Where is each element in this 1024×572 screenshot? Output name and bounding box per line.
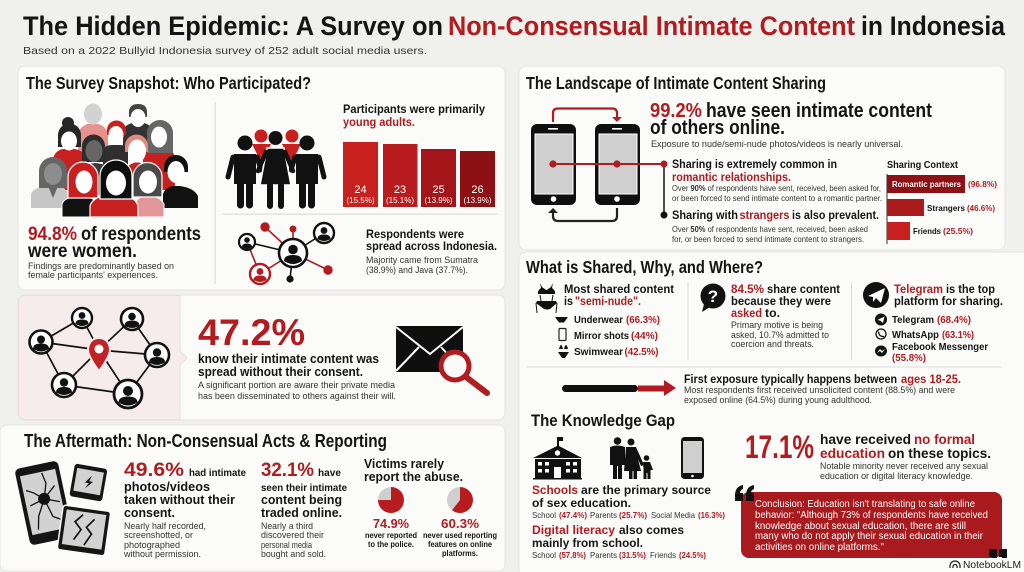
icon: lingerie — [536, 283, 557, 313]
stat: taken without consent — [123, 460, 246, 559]
heading: young adults: Participants were primarily — [343, 104, 486, 116]
bar chart: sharing context: (46.6%) — [967, 203, 995, 213]
subtitle: Based on a 2022 Bullyid Indonesia survey of 252 adult social media users. — [23, 45, 427, 57]
stat: traded online: 32.1% — [261, 460, 314, 481]
stat: 47.2 percent: spread without their consent. — [198, 364, 363, 379]
text: motive: because they were — [731, 296, 831, 308]
bar chart: ages: (15.5%) — [346, 196, 375, 205]
icon: family — [610, 437, 653, 479]
list: shared content types — [555, 315, 660, 358]
stat: women respondents: 94.8% — [28, 224, 77, 245]
text: conclusion quote: activities on online platforms." — [755, 542, 885, 553]
stat: taken without consent: screenshotted, or — [124, 530, 193, 540]
text: spread across Indonesia: (38.9%) and Java (37.7%). — [366, 265, 468, 275]
text: digital literacy: also comes — [619, 523, 684, 537]
stat: women respondents — [27, 224, 201, 281]
stat: 99.2 percent: 99.2% — [650, 100, 702, 122]
stat: 99.2 percent: have seen intimate content — [706, 100, 932, 122]
icon: school building — [533, 437, 582, 480]
text: strangers: Sharing with — [672, 210, 738, 222]
text: conclusion quote: knowledge about sexual education, there are still — [755, 521, 966, 532]
pie chart: platform reporting — [423, 487, 497, 558]
stat: 17.1 percent: have received — [820, 431, 911, 447]
icon: opening quote — [735, 485, 754, 501]
pie chart: police reporting: to the police. — [368, 540, 414, 549]
icon: two phones exchanging — [531, 108, 668, 221]
stat: women respondents: female participants' experiences. — [28, 270, 158, 281]
panel: landscape of sharing — [519, 66, 1005, 250]
bar chart: sharing context: Strangers — [927, 203, 965, 213]
watermark: NotebookLM — [946, 558, 1024, 572]
icon: envelope and magnifier — [396, 326, 487, 393]
list: shared content types: (44%) — [631, 331, 658, 342]
heading: survey snapshot: The Survey Snapshot: Who Participated? — [26, 73, 311, 93]
stat: traded online: bought and sold. — [261, 549, 326, 559]
stat: 17.1 percent: Notable minority never received any sexual — [820, 461, 988, 471]
stat: 17.1 percent: education or digital literacy knowledge. — [820, 471, 973, 481]
stat: women respondents: Findings are predominantly based on — [28, 261, 174, 272]
stat: 47.2 percent — [198, 312, 396, 402]
stat: traded online: Nearly a third — [261, 521, 313, 531]
stat: 47.2 percent: A significant portion are aware their private media — [198, 380, 396, 391]
text: first exposure: ages 18-25. — [901, 374, 961, 386]
bar chart: sharing context: Friends — [913, 226, 941, 236]
text: motive: to. — [765, 308, 780, 320]
text: romantic relationships: Sharing is extremely common in — [672, 159, 837, 171]
pie chart: police reporting: 74.9% — [373, 517, 409, 531]
text: romantic relationships: or been forced to send intimate content to a romantic partner. — [672, 193, 882, 203]
icon: question bubble: ? — [708, 287, 718, 306]
bar chart: ages: (15.1%) — [386, 196, 414, 205]
panel: the aftermath — [0, 425, 505, 571]
stat: traded online: have — [318, 467, 341, 479]
pie chart: platform reporting: platforms. — [442, 549, 478, 558]
stat: taken without consent: photos/videos — [124, 479, 210, 494]
bar chart: ages: (13.9%) — [463, 196, 492, 205]
stat: 47.2 percent: know their intimate content was — [198, 351, 379, 366]
panel: spread without consent — [18, 295, 505, 420]
text: schools primary source: Social Media — [651, 510, 695, 520]
text: conclusion quote — [755, 499, 988, 553]
text: spread across Indonesia: Majority came from Sumatra — [366, 255, 479, 265]
text: semi-nude content: Most shared content — [564, 284, 674, 296]
text: telegram top platform: platform for sharing. — [894, 296, 1003, 308]
list: platforms: Facebook Messenger — [892, 342, 988, 353]
text: strangers: for, or been forced to send intimate content to strangers. — [672, 234, 864, 244]
title: The Hidden Epidemic: A Survey on — [23, 11, 443, 41]
callout: conclusion — [735, 485, 1007, 564]
pie chart: platform reporting: features on online — [428, 540, 493, 549]
stat: 47.2 percent: 47.2% — [198, 312, 305, 353]
stat: taken without consent: consent. — [124, 505, 175, 520]
stat: 17.1 percent: 17.1% — [745, 429, 814, 465]
text: schools primary source: of sex education. — [532, 496, 631, 510]
text: first exposure: First exposure typically happens between — [684, 374, 897, 386]
bar chart: sharing context: Sharing Context — [887, 159, 958, 171]
arrow: first exposure timeline — [562, 380, 676, 396]
text: digital literacy — [532, 523, 706, 560]
text: telegram top platform: Telegram — [894, 284, 943, 296]
bar chart: sharing context: Romantic partners — [892, 179, 961, 189]
text: semi-nude content: is — [564, 296, 573, 308]
text: conclusion quote: Conclusion: Education isn't translating to safe online — [755, 499, 976, 510]
text: digital literacy: (24.5%) — [679, 550, 706, 560]
stat: taken without consent: Nearly half recorded, — [124, 521, 206, 531]
text: romantic relationships — [672, 159, 882, 203]
heading: what is shared: What is Shared, Why, and Where? — [526, 257, 763, 277]
icon: question bubble — [700, 284, 726, 312]
panel: survey snapshot — [18, 66, 505, 290]
text: motive: share content — [767, 284, 840, 296]
text: digital literacy: Digital literacy — [532, 523, 615, 537]
list: shared content types: Mirror shots — [574, 331, 629, 342]
text: digital literacy: (57.8%) — [559, 550, 586, 560]
list: platforms — [875, 314, 988, 364]
bar chart: ages: 23 — [394, 184, 406, 196]
stat: 17.1 percent: on these topics. — [888, 445, 991, 461]
heading: aftermath: The Aftermath: Non-Consensual Acts & Reporting — [24, 431, 387, 451]
list: shared content types: (42.5%) — [624, 347, 658, 358]
stat: taken without consent: taken without their — [124, 492, 235, 507]
text: conclusion quote: behavior: "Although 73% of respondents have received — [755, 510, 988, 521]
icon: geographic network — [239, 222, 334, 284]
text: motive: Primary motive is being — [731, 320, 823, 330]
text: motive — [731, 284, 840, 349]
list: platforms: Telegram — [892, 315, 934, 326]
stat: traded online: traded online. — [261, 505, 342, 520]
text: digital literacy: Parents — [590, 550, 617, 560]
icon: cracked phones — [14, 460, 111, 556]
text: motive: coercion and threats. — [731, 339, 814, 349]
text: digital literacy: (31.5%) — [619, 550, 646, 560]
panel: what, why and where — [519, 252, 1024, 572]
list: platforms: (68.4%) — [937, 315, 971, 326]
pie chart: police reporting: never reported — [365, 531, 417, 540]
stat: 17.1 percent: education — [820, 445, 885, 461]
stat: 99.2 percent — [650, 100, 932, 150]
text: digital literacy: mainly from school. — [532, 536, 643, 550]
pie chart: platform reporting: 60.3% — [441, 517, 479, 531]
title — [23, 11, 1005, 41]
heading: victims rarely report: report the abuse. — [364, 469, 463, 484]
text: motive: 84.5% — [731, 284, 764, 296]
heading: victims rarely report — [364, 456, 463, 484]
text: romantic relationships: Over 90% of respondents have sent, received, been asked for, — [672, 183, 881, 193]
bar chart: ages: 24 — [354, 184, 367, 196]
list: shared content types: (66.3%) — [626, 315, 660, 326]
text: schools primary source: (16.3%) — [698, 510, 725, 520]
stat: traded online: content being — [261, 492, 342, 507]
text: first exposure — [684, 374, 961, 405]
list: shared content types: Underwear — [574, 315, 623, 326]
text: strangers: is also prevalent. — [792, 210, 879, 222]
stat: traded online: discovered their — [261, 530, 324, 540]
text: schools primary source: (47.4%) — [559, 510, 587, 520]
text: strangers: Over 50% of respondents have sent, received, been asked — [672, 224, 868, 234]
text: telegram top platform: is the top — [946, 284, 995, 296]
heading: knowledge gap: The Knowledge Gap — [531, 411, 675, 430]
heading: young adults: young adults. — [343, 117, 415, 129]
text: strangers: strangers — [740, 210, 790, 222]
text: schools primary source: Schools — [532, 483, 578, 497]
stat: women respondents: of respondents — [81, 224, 201, 245]
stat: 17.1 percent: no formal — [914, 431, 975, 447]
stat: taken without consent: without permission. — [123, 549, 201, 559]
bar chart: sharing context: (25.5%) — [943, 226, 973, 236]
stat: taken without consent: 49.6% — [124, 460, 184, 481]
bar chart: sharing context — [886, 159, 997, 244]
bar chart: ages — [343, 142, 495, 207]
text: semi-nude content — [564, 284, 674, 308]
stat: taken without consent: photographed — [124, 540, 180, 550]
text: conclusion quote: many who do not apply their sexual education in their — [755, 531, 984, 542]
bar chart: sharing context: (96.8%) — [968, 179, 997, 189]
bar chart: ages: (13.9%) — [424, 196, 453, 205]
list: platforms: WhatsApp — [892, 330, 939, 341]
text: first exposure: exposed online (64.5%) during young adulthood. — [684, 395, 872, 405]
text: schools primary source: School — [532, 510, 556, 520]
stat: 99.2 percent: Exposure to nude/semi-nude photos/videos is nearly universal. — [651, 139, 903, 150]
list: platforms: (55.8%) — [892, 353, 926, 364]
icon: smartphone — [681, 437, 704, 479]
heading: victims rarely report: Victims rarely — [364, 456, 445, 471]
text: telegram top platform — [894, 284, 1003, 308]
stat: traded online: seen their intimate — [261, 482, 347, 494]
icon: crowd of respondents — [31, 104, 198, 217]
pie chart: platform reporting: never used reporting — [423, 531, 497, 540]
text: motive: asked, 10.7% admitted to — [731, 330, 829, 340]
icon: closing quote — [989, 549, 1007, 564]
list: platforms: (63.1%) — [942, 330, 974, 341]
stat: traded online — [261, 460, 347, 559]
stat: 17.1 percent — [745, 429, 991, 481]
text: spread across Indonesia — [366, 229, 497, 275]
text: schools primary source: (25.7%) — [619, 510, 647, 520]
icon: network with location pin — [30, 308, 169, 408]
icon: telegram — [863, 282, 889, 308]
stat: 99.2 percent: of others online. — [650, 117, 785, 139]
stat: 47.2 percent: has been disseminated to others against their will. — [198, 391, 396, 402]
icon: young adults group — [228, 130, 324, 206]
watermark: NotebookLM: NotebookLM — [963, 559, 1021, 571]
heading: young adults — [343, 104, 486, 129]
title: in Indonesia — [861, 11, 1005, 41]
text: schools primary source: are the primary source — [581, 483, 711, 497]
text: digital literacy: School — [532, 550, 556, 560]
stat: taken without consent: had intimate — [189, 467, 246, 479]
text: strangers — [672, 210, 879, 244]
text: spread across Indonesia: spread across Indonesia. — [366, 241, 497, 253]
text: digital literacy: Friends — [650, 550, 676, 560]
text: semi-nude content: "semi-nude". — [575, 296, 641, 308]
bar chart: ages: 26 — [471, 184, 484, 196]
list: shared content types: Swimwear — [574, 347, 623, 358]
text: motive: asked — [731, 308, 762, 320]
text: spread across Indonesia: Respondents were — [366, 229, 464, 241]
title: Non-Consensual Intimate Content — [448, 11, 855, 41]
stat: traded online: personal media — [261, 540, 313, 550]
text: schools primary source: Parents — [590, 510, 617, 520]
text: schools primary source — [532, 483, 725, 520]
bar chart: ages: 25 — [432, 184, 445, 196]
text: first exposure: Most respondents first received unsolicited content (88.5%) and were — [684, 385, 955, 395]
pie chart: police reporting — [365, 487, 417, 549]
stat: women respondents: were women. — [27, 241, 137, 262]
heading: landscape: The Landscape of Intimate Content Sharing — [526, 73, 826, 93]
text: romantic relationships: romantic relationships. — [672, 172, 791, 184]
